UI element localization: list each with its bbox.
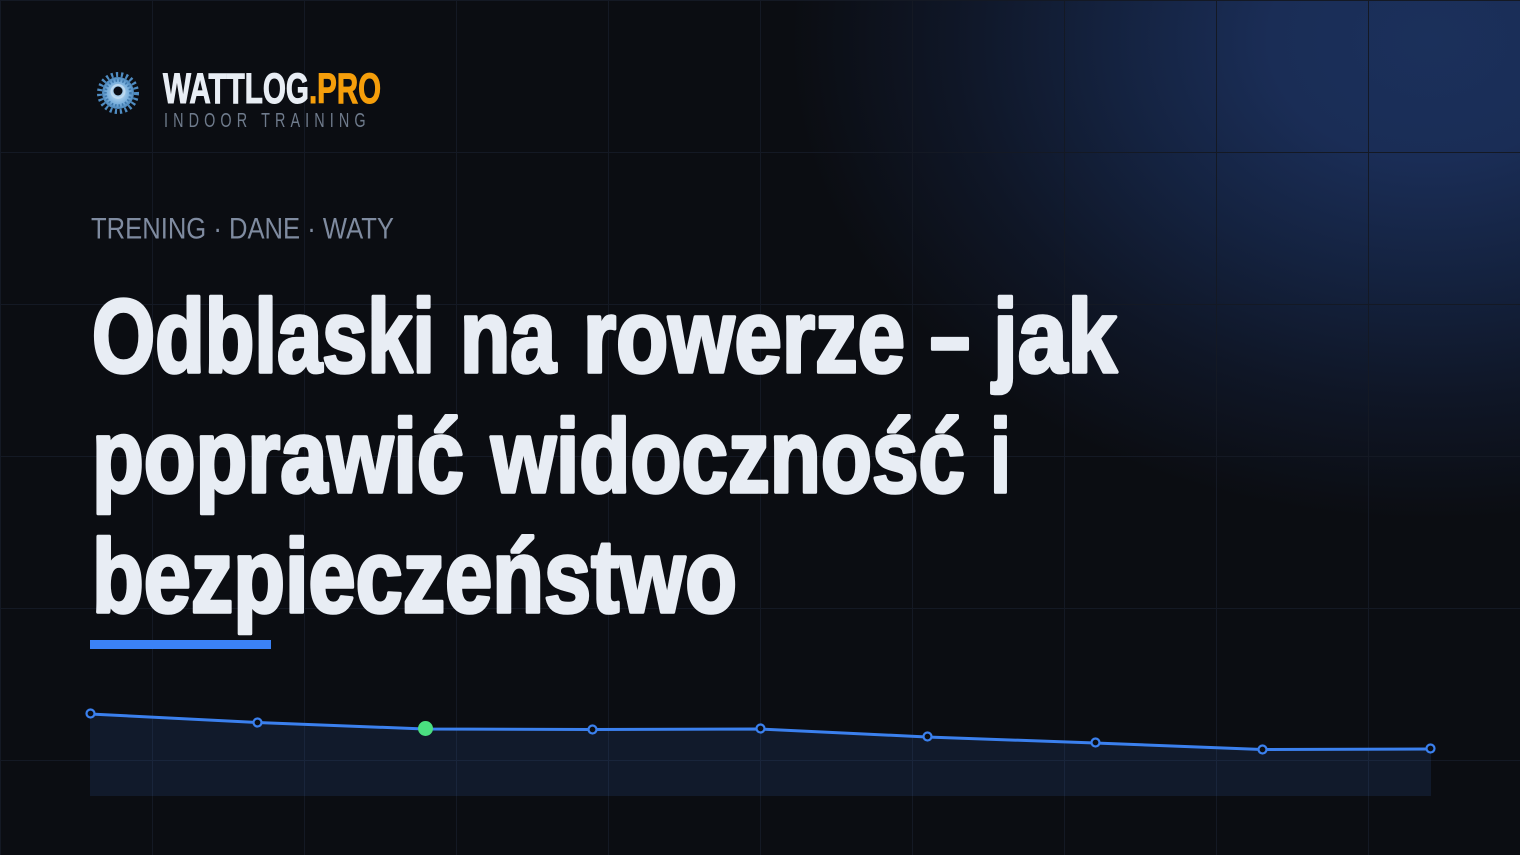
title bbox=[92, 279, 1117, 635]
chart points bbox=[86, 710, 1434, 754]
title underline bbox=[90, 640, 271, 649]
highlighted point bbox=[418, 721, 433, 736]
eyebrow: TRENING · DANE · WATY bbox=[91, 212, 394, 246]
title: widoczność bbox=[490, 399, 965, 515]
title: – bbox=[930, 279, 970, 395]
logo bbox=[100, 65, 381, 132]
icon: cassette gear bbox=[100, 74, 136, 112]
title: na bbox=[460, 279, 557, 395]
title: rowerze bbox=[583, 279, 905, 395]
title: Odblaski bbox=[92, 279, 435, 395]
title: i bbox=[990, 399, 1011, 515]
line chart bbox=[86, 710, 1434, 796]
title: jak bbox=[991, 279, 1117, 395]
tagline: INDOOR TRAINING bbox=[164, 109, 366, 132]
title: poprawić bbox=[92, 399, 464, 515]
chart line bbox=[90, 714, 1431, 750]
title: bezpieczeństwo bbox=[92, 519, 737, 635]
brand name: WATTLOG bbox=[163, 65, 309, 113]
brand suffix: .PRO bbox=[309, 65, 381, 113]
chart area bbox=[90, 714, 1431, 796]
